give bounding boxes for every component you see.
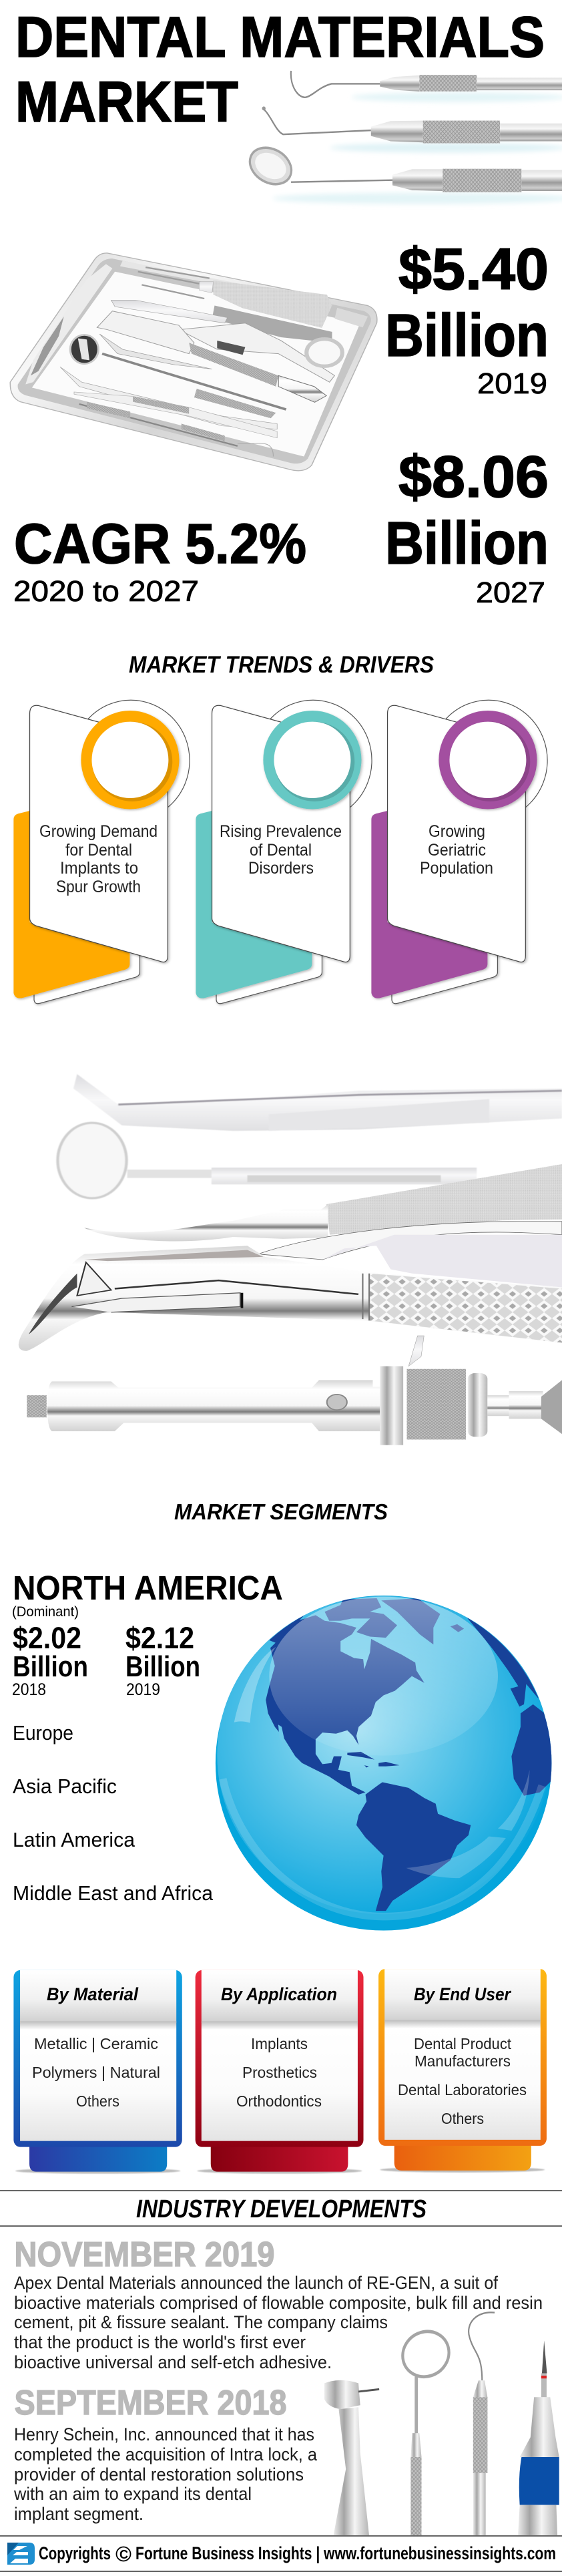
by application list: Implants (251, 2035, 308, 2052)
text block: November 2019 development: cement, pit & fissure sealant. The company claims (14, 2312, 388, 2332)
text block: September 2018 development: with an aim to expand its dental (13, 2484, 252, 2504)
image: forceps, mirror and syringe (19, 1074, 562, 1445)
title (15, 5, 545, 134)
by material list: Polymers | Natural (32, 2064, 160, 2081)
globe (216, 1596, 553, 1931)
stat: North America 2019: 2019 (126, 1680, 160, 1699)
heading: market segments: MARKET SEGMENTS (174, 1499, 388, 1524)
text block: September 2018 development: SEPTEMBER 2018 (15, 2384, 287, 2422)
heading: industry developments: INDUSTRY DEVELOPMENTS (136, 2195, 427, 2223)
stat: 2019 market size: 2019 (477, 367, 547, 400)
panel: regional segments text: (Dominant) (12, 1604, 79, 1620)
stat: North America 2018: 2018 (12, 1680, 46, 1699)
by end user list: Dental Product (414, 2035, 512, 2052)
region list: Latin America (13, 1828, 135, 1851)
card 3 text (420, 822, 493, 878)
stat: North America 2019: Billion (125, 1650, 200, 1683)
by material heading: By Material (47, 1984, 138, 2004)
stat: 2019 market size (385, 236, 549, 400)
image: three dental hand instruments (245, 71, 562, 204)
card 3 text: Growing (429, 822, 485, 841)
panel: by material (13, 1970, 182, 2174)
by application frame (196, 1970, 364, 2174)
card 2 text: Rising Prevalence (220, 822, 342, 841)
card 1 text: Implants to (60, 859, 138, 878)
text block: September 2018 development: provider of dental restoration solutions (14, 2464, 304, 2485)
panel: by application (196, 1970, 364, 2174)
stat: North America 2019: $2.12 (125, 1621, 194, 1655)
region list (13, 1721, 214, 1905)
text block: November 2019 development: bioactive materials comprised of flowable composite, bulk fill and resin (14, 2293, 543, 2313)
copyright text: Copyrights (39, 2543, 111, 2563)
title: MARKET (15, 70, 238, 134)
CAGR block (13, 512, 306, 608)
panel: trend card 3 (371, 700, 547, 1004)
CAGR block: CAGR 5.2% (14, 512, 306, 575)
text block: November 2019 development: NOVEMBER 2019 (15, 2235, 275, 2274)
stat: 2027 market size (385, 443, 549, 609)
text block: September 2018 development: Henry Schein, Inc. announced that it has (14, 2424, 314, 2444)
text block: September 2018 development (13, 2384, 318, 2524)
by application list (236, 2035, 322, 2110)
card 2 text: of Dental (250, 841, 312, 860)
stat: North America 2018 (12, 1621, 88, 1699)
region list: Middle East and Africa (13, 1881, 214, 1905)
CAGR block: 2020 to 2027 (13, 575, 199, 608)
panel: trend card 1 (13, 700, 190, 1004)
stat: 2027 market size: 2027 (476, 576, 545, 609)
card 1 text (39, 822, 158, 896)
card 3 text: Geriatric (428, 841, 486, 860)
by application heading: By Application (221, 1984, 337, 2004)
heading: market trends and drivers: MARKET TRENDS & DRIVERS (129, 652, 434, 678)
by material list: Others (76, 2092, 119, 2110)
stat: North America 2018: Billion (13, 1650, 88, 1683)
by application list: Prosthetics (242, 2064, 317, 2081)
by end user list: Manufacturers (414, 2052, 511, 2070)
card 2 artwork (196, 700, 372, 1004)
by end user heading: By End User (414, 1984, 511, 2004)
stat: 2027 market size: $8.06 (398, 443, 549, 510)
icon: Fortune Business Insights logo (7, 2543, 35, 2565)
by end user list: Others (441, 2110, 484, 2127)
text block: September 2018 development: completed the acquisition of Intra lock, a (14, 2444, 318, 2464)
panel: trend card 2 (196, 700, 372, 1004)
footer (0, 2535, 562, 2572)
stat: 2019 market size: $5.40 (398, 236, 549, 302)
panel: regional segments text (12, 1569, 283, 1905)
text block: November 2019 development: that the product is the world's first ever (14, 2332, 306, 2352)
text block: November 2019 development (14, 2235, 543, 2372)
card 3 text: Population (420, 859, 493, 878)
image: handpiece, mirror, probe and drill (324, 2312, 559, 2536)
card 1 artwork (13, 700, 190, 1004)
by material list: Metallic | Ceramic (34, 2035, 158, 2052)
stat: North America 2019 (125, 1621, 200, 1699)
region list: Asia Pacific (13, 1775, 117, 1798)
card 2 text (220, 822, 342, 878)
image: stainless steel tray with instruments (10, 253, 377, 471)
by end user list (398, 2035, 527, 2127)
copyright text: C (119, 2548, 128, 2561)
by end user frame (378, 1969, 547, 2173)
text block: September 2018 development: implant segment. (14, 2504, 144, 2524)
by end user list: Dental Laboratories (398, 2081, 527, 2098)
text block: November 2019 development: Apex Dental Materials announced the launch of RE-GEN, a suit of (14, 2273, 498, 2293)
by application list: Orthodontics (236, 2092, 322, 2110)
panel: regional segments text: NORTH AMERICA (13, 1569, 283, 1607)
text block: November 2019 development: bioactive universal and self-etch adhesive. (14, 2352, 332, 2372)
card 1 text: Growing Demand (39, 822, 158, 841)
card 1 text: for Dental (65, 841, 132, 860)
region list: Europe (13, 1721, 73, 1744)
card 2 text: Disorders (248, 859, 314, 878)
stat: North America 2018: $2.02 (13, 1621, 81, 1655)
card 1 text: Spur Growth (56, 878, 141, 896)
by material frame (13, 1970, 182, 2174)
card 3 artwork (371, 700, 547, 1004)
panel: by end user (378, 1969, 547, 2173)
by material list (32, 2035, 160, 2110)
